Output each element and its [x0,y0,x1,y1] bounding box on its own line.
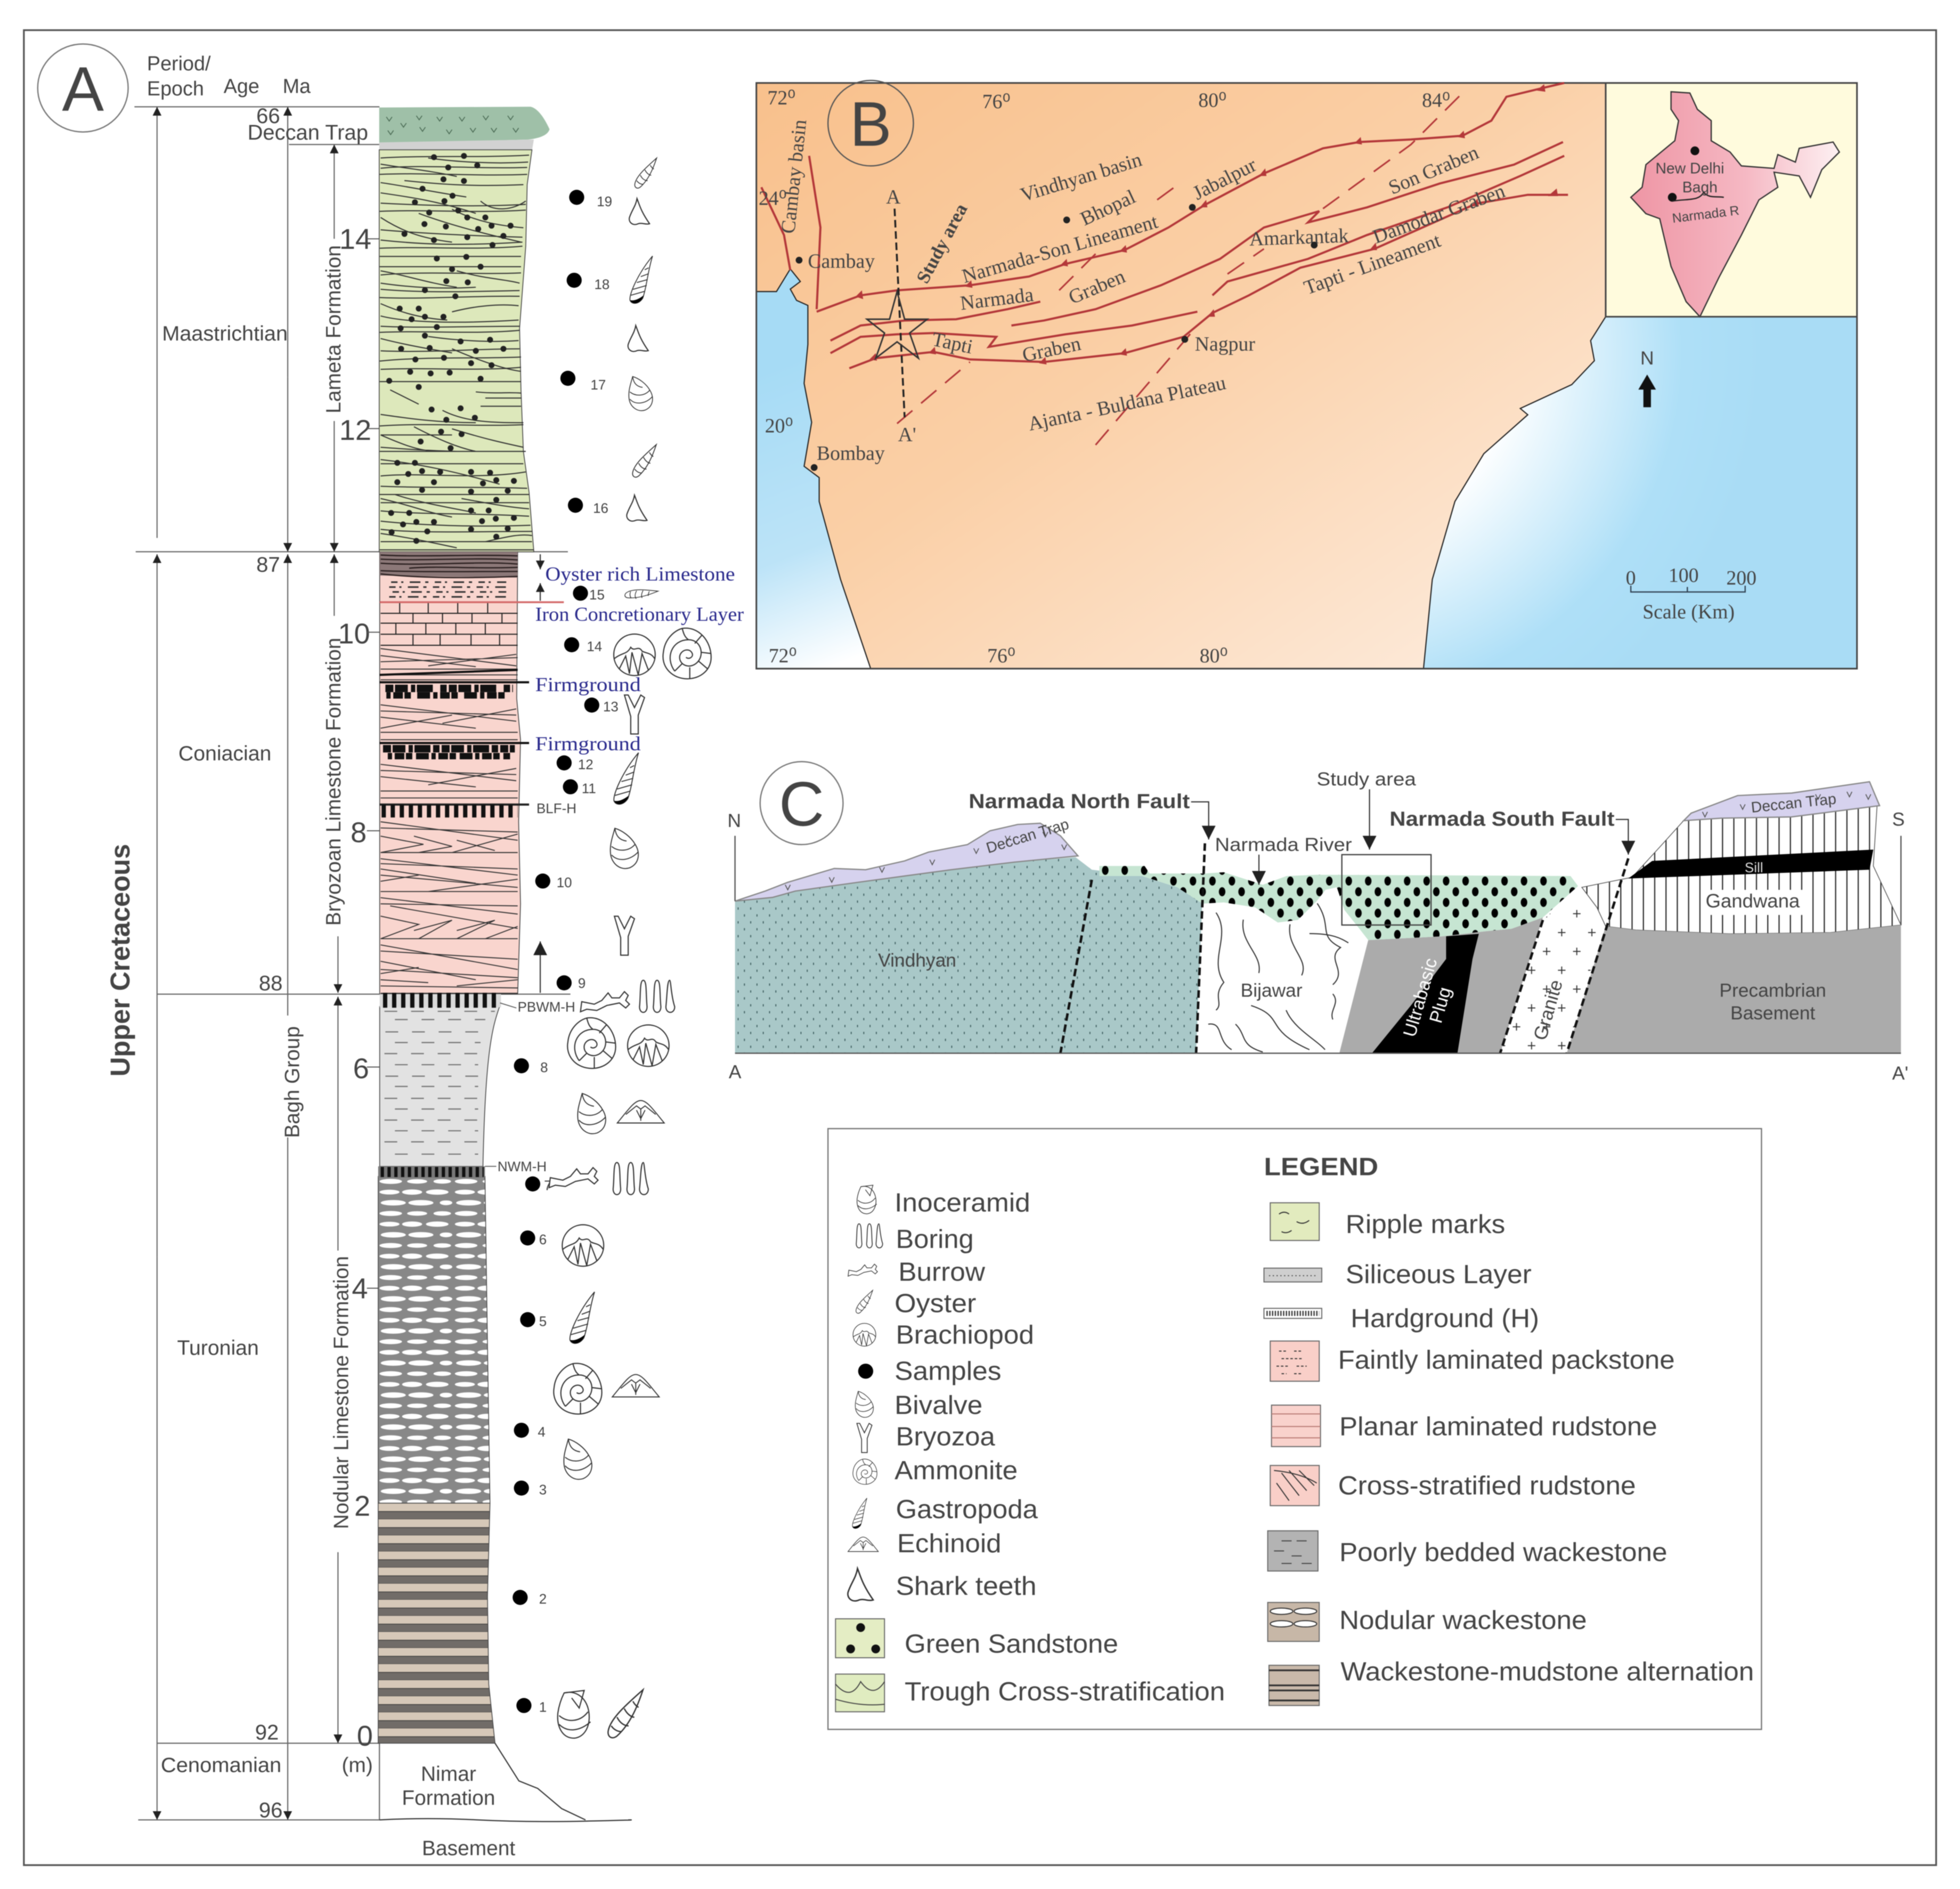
formation labels: Bagh Group [281,1026,304,1138]
fossil icons [549,158,711,1738]
column headers: Ma [283,75,311,98]
north arrow [1638,348,1656,407]
map labels: 76⁰ [987,645,1015,667]
scale bar: 200 [1726,567,1756,589]
scale bar: 100 [1669,564,1698,587]
grey basement [1339,918,1543,1053]
Gandwana unit [1582,806,1901,934]
section labels: Narmada North Fault [969,790,1190,813]
map labels: Tapti [930,328,975,359]
column headers: Period/ [147,52,211,75]
stage labels [161,322,373,1777]
map labels: 80⁰ [1198,89,1226,111]
lithology: Deccan Trap and Lameta sandstone [379,107,550,552]
fossil key text: Samples [894,1357,1002,1386]
stage labels: Turonian [177,1337,259,1360]
map labels: Nagpur [1195,333,1255,355]
lithology key text [1338,1210,1754,1686]
section labels: Gandwana [1705,890,1800,912]
age numbers: 96 [259,1799,282,1822]
blue horizon labels: Firmground [535,674,641,695]
lithology key text: Wackestone-mudstone alternation [1340,1657,1754,1686]
map labels: 76⁰ [982,91,1011,113]
sample numbers: 15 [589,588,605,603]
fossil key text: Ammonite [894,1456,1018,1485]
fossil key text: Green Sandstone [905,1629,1118,1659]
map labels: Graben [1020,333,1083,367]
Deccan v marks [785,792,1871,890]
blue horizon labels: Firmground [535,733,641,755]
India labels [1655,147,1740,226]
map labels: Damodar Graben [1370,180,1508,248]
lithology: wackestone-mudstone alternation [378,1503,495,1743]
hardground labels: BLF-H [536,801,576,816]
green sandstone [1100,866,1578,940]
formation labels: Nodular Limestone Formation [330,1256,353,1529]
scale bar: Scale (Km) [1642,601,1735,623]
age numbers: 88 [259,972,282,995]
map labels: Vindhyan basin [1018,148,1144,206]
stage labels: (m) [341,1754,373,1777]
Nimar and Basement labels: Nimar [421,1763,476,1786]
sample numbers: 10 [557,875,572,890]
section labels: Sill [1745,861,1763,875]
metre scale [338,223,379,1752]
metre scale: 4 [352,1272,368,1304]
sample numbers: 8 [540,1060,548,1075]
sample numbers: 5 [539,1314,547,1329]
land [757,83,1606,669]
map labels: Cambay [808,250,875,272]
Nimar Formation outline [379,1743,631,1821]
lithology key text: Planar laminated rudstone [1339,1412,1657,1441]
scale bar: 0 [1626,567,1636,589]
sample numbers: 13 [603,700,619,715]
star: study area [867,291,927,358]
age numbers: 92 [255,1721,279,1744]
fault lines [761,83,1568,368]
map labels: Graben [1066,265,1128,309]
fossil key text: Oyster [894,1288,976,1318]
badge A: A [62,54,104,124]
trend arrows [540,554,541,993]
stage labels: Coniacian [178,742,271,765]
granite [1500,901,1606,1053]
fossil key text: Shark teeth [896,1571,1037,1601]
Deccan Trap south [1684,782,1880,821]
Nimar and Basement labels: Basement [422,1837,515,1860]
fossil key text: Brachiopod [896,1320,1034,1349]
metre scale: 6 [353,1053,369,1085]
panel B: location map [757,80,1857,669]
map labels: Narmada-Son Lineament [959,210,1160,288]
stage labels: Maastrichtian [162,322,288,345]
map labels: 24⁰ [759,187,787,209]
section labels: Basement [1730,1003,1815,1024]
fossil key text: Gastropoda [896,1495,1038,1524]
section labels [727,769,1908,1084]
sample numbers: 14 [587,639,602,654]
blue horizon labels [535,563,744,755]
sample numbers: 9 [578,976,585,991]
map labels: Jabalpur [1189,153,1260,205]
section labels: Plug [1426,985,1455,1025]
map labels: Ajanta - Buldana Plateau [1026,371,1228,435]
lithology: nodular wackestone [378,1166,490,1503]
Nimar and Basement labels: Formation [402,1787,495,1810]
sample numbers: 7 [544,1179,552,1194]
western sea [757,271,871,669]
map labels: Amarkantak [1249,224,1349,250]
blue horizon labels: Oyster rich Limestone [546,563,735,585]
metre scale: 10 [338,618,370,650]
hardground labels [485,801,576,1174]
map labels: Cambay basin [777,118,811,234]
map labels: Bhopal [1077,185,1139,230]
sample numbers: 18 [594,277,609,292]
map labels: Tapti - Lineament [1301,229,1444,299]
column headers: Epoch [147,77,204,100]
sample numbers: 1 [539,1700,547,1715]
metre scale: 14 [339,223,371,255]
scale bar [1626,564,1756,623]
India labels: Bagh [1682,179,1718,196]
study area box [1342,855,1431,925]
section labels: Vindhyan [878,950,956,971]
Bijawar wavy lines [1208,903,1348,1052]
stage labels: Cenomanian [161,1754,281,1777]
legend title: LEGEND [1264,1152,1378,1180]
fault callouts [1191,789,1628,885]
blue horizon labels: Iron Concretionary Layer [535,603,744,625]
section labels: Bijawar [1241,980,1303,1001]
right basement [1567,925,1901,1053]
sample numbers: 16 [593,501,608,516]
sample numbers: 4 [538,1425,546,1440]
section labels: Study area [1317,769,1416,790]
badge C: C [779,769,824,839]
base line [735,836,1901,1053]
lithology key text: Cross-stratified rudstone [1338,1471,1636,1500]
badge B: B [850,89,892,159]
column headers [147,52,311,100]
map labels: A' [898,424,916,446]
section labels: Ultrabasic [1400,956,1441,1039]
panel A: stratigraphic column [38,44,744,1860]
lithology key text: Nodular wackestone [1339,1606,1587,1635]
formation labels: Lameta Formation [322,245,345,414]
faults [1060,844,1628,1053]
fossil key text: Echinoid [897,1529,1002,1558]
map labels: Narmada [959,283,1035,315]
India outline [1631,92,1840,317]
section labels: S [1892,809,1905,830]
sample dots [513,190,599,1713]
map labels: Study area [912,200,972,287]
inset: India [1606,83,1857,317]
section labels: Deccan Trap [1750,790,1837,816]
legend box [828,1129,1761,1729]
fossil key text: Inoceramid [894,1188,1030,1218]
fault teeth [856,84,1558,364]
map labels: Son Graben [1385,141,1482,199]
age numbers: 87 [256,553,280,577]
hardground labels: PBWM-H [518,1000,575,1015]
sample numbers [538,194,619,1715]
Deccan Trap label: Deccan Trap [248,121,368,144]
period label: Upper Cretaceous [105,844,135,1076]
section labels: Deccan Trap [984,815,1071,856]
map base sea [757,83,1857,669]
map labels: 80⁰ [1200,645,1228,667]
badge C [760,761,843,845]
map labels: 72⁰ [769,645,797,667]
fossil key icons [848,1185,883,1601]
north arrow: N [1640,348,1654,369]
sample numbers: 19 [597,194,612,209]
age and formation guide lines [134,107,571,1820]
map labels: 20⁰ [765,415,793,437]
sample numbers: 17 [590,378,606,393]
metre scale: 0 [357,1720,373,1752]
Deccan Trap north [735,823,1078,901]
map border [757,83,1857,669]
fossil key text: Boring [896,1225,974,1254]
sample numbers: 12 [578,757,593,772]
sample numbers: 3 [539,1482,547,1497]
fossil key text: Trough Cross-stratification [905,1677,1225,1706]
metre scale: 2 [354,1490,370,1522]
lineament dashes [897,89,1466,445]
map labels: A [886,186,900,208]
fossil key text [894,1188,1225,1706]
badge B [828,80,914,166]
lithology key text: Poorly bedded wackestone [1339,1537,1668,1567]
map city dots [796,204,1317,471]
hardground labels: NWM-H [498,1160,547,1174]
metre scale: 12 [339,415,371,447]
Vindhyan unit [735,857,1202,1053]
age numbers: 66 [256,104,280,128]
lithology key text: Ripple marks [1346,1210,1505,1239]
section labels: Precambrian [1719,980,1826,1001]
badge A [38,44,128,132]
lithology key text: Siliceous Layer [1346,1260,1532,1289]
age numbers [255,104,282,1822]
formation labels: Bryozoan Limestone Formation [322,638,345,926]
column headers: Age [224,75,259,98]
section labels: Narmada River [1215,834,1352,855]
formation labels [281,245,353,1529]
lithology key text: Hardground (H) [1351,1304,1539,1333]
map labels: 84⁰ [1422,89,1450,111]
fossil key text: Bivalve [894,1390,982,1420]
section labels: A [729,1062,742,1083]
section labels: Narmada South Fault [1389,808,1615,830]
Bijawar unit [1196,886,1370,1053]
lithology key text: Faintly laminated packstone [1338,1345,1675,1375]
section line A-A' [894,209,905,417]
sample numbers: 11 [582,781,596,796]
panel C: cross section [727,761,1908,1084]
section labels: A' [1892,1063,1908,1084]
lithology: Bryozoan limestone [380,552,564,1166]
sill [1628,849,1873,879]
ultrabasic plug [1372,934,1479,1053]
map labels: Bombay [817,442,885,465]
India labels: Narmada R [1671,204,1740,226]
sample numbers: 6 [539,1233,547,1247]
metre scale: 8 [351,816,367,848]
map labels [759,87,1508,667]
panel: legend [828,1129,1761,1729]
section labels: N [727,810,741,831]
India labels: New Delhi [1655,159,1724,176]
map labels: 72⁰ [767,87,795,109]
fossil key text: Bryozoa [896,1422,995,1451]
lithology swatches [835,1203,1322,1712]
section labels: Granite [1530,977,1567,1043]
sample numbers: 2 [539,1592,547,1607]
Nimar and Basement labels [402,1763,515,1860]
fossil key text: Burrow [898,1257,985,1286]
